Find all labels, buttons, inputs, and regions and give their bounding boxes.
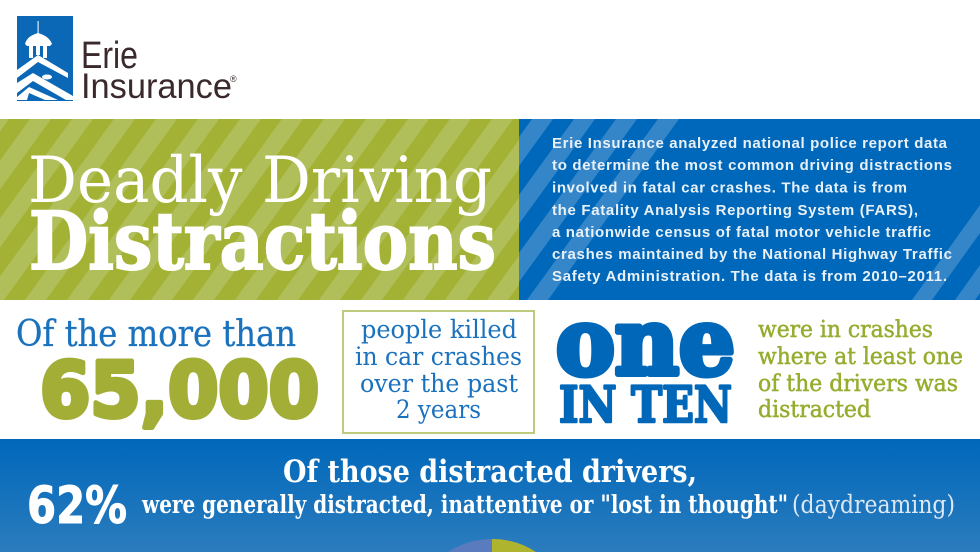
icon: blue logo square with white building cupola	[17, 16, 73, 101]
word: one: one	[556, 288, 735, 396]
intro paragraph: the Fatality Analysis Reporting System (FARS),	[552, 202, 918, 219]
text: were in crashes where at least one driver was distracted: distracted	[758, 397, 871, 423]
title line: Distractions: Distractions	[29, 194, 496, 288]
text: were in crashes where at least one driver was distracted: were in crashes	[758, 317, 933, 343]
description: daydreaming: (daydreaming)	[792, 490, 955, 519]
heading: of those distracted drivers: Of those distracted drivers,	[283, 454, 697, 490]
registered mark: ®	[230, 74, 237, 84]
lead-in text: Of the more than	[16, 314, 296, 355]
wordmark: Insurance: Insurance	[81, 67, 232, 106]
callout box: people killed: in car crashes	[355, 342, 522, 371]
statistic: one in ten	[556, 288, 735, 434]
intro paragraph: to determine the most common driving distractions	[552, 157, 952, 174]
pie chart	[448, 539, 536, 552]
text: were in crashes where at least one driver was distracted	[758, 317, 963, 423]
intro paragraph: crashes maintained by the National Highway Traffic	[552, 246, 952, 263]
panel: green title banner	[0, 119, 519, 300]
intro paragraph: Safety Administration. The data is from 2010–2011.	[552, 268, 947, 285]
text: were in crashes where at least one driver was distracted: where at least one	[758, 344, 963, 370]
intro paragraph	[552, 135, 952, 285]
logo: Erie Insurance	[17, 16, 237, 106]
callout box: people killed: people killed	[361, 315, 517, 344]
callout box: people killed: 2 years	[396, 395, 481, 424]
intro paragraph: Erie Insurance analyzed national police report data	[552, 135, 948, 152]
words: IN TEN: IN TEN	[559, 375, 732, 434]
description line: were generally distracted, inattentive or "lost in thought"	[141, 490, 788, 519]
intro paragraph: a nationwide census of fatal motor vehicle traffic	[552, 224, 931, 241]
callout box: people killed: over the past	[360, 369, 518, 398]
big number 65,000: 65,000	[40, 346, 319, 434]
title line: Deadly Driving: Deadly Driving	[28, 144, 492, 218]
wordmark: Erie: Erie	[81, 35, 138, 77]
text: were in crashes where at least one driver was distracted: of the drivers was	[758, 371, 958, 397]
intro paragraph: involved in fatal car crashes. The data is from	[552, 180, 907, 196]
callout box: people killed	[343, 311, 534, 433]
statistic: 62%: 62%	[27, 477, 127, 536]
statistic: of the more than 65,000	[16, 314, 319, 434]
panel: blue introduction	[519, 119, 980, 300]
panel: distracted drivers	[0, 439, 980, 552]
